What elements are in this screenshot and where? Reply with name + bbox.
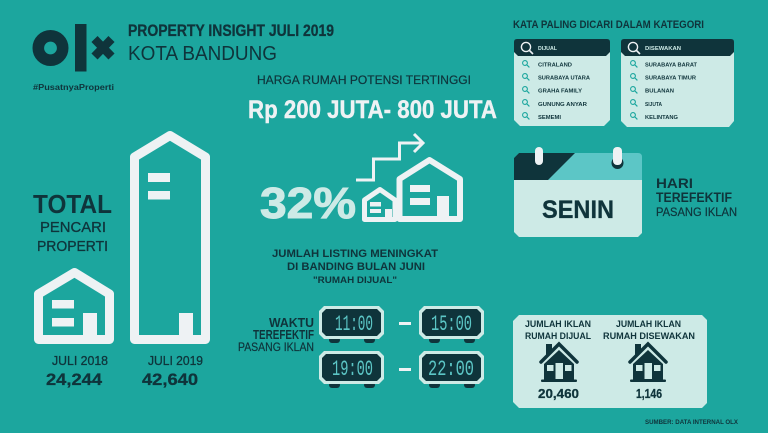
value: 20,460: 20,460	[538, 386, 579, 401]
panel: disewakan search list	[621, 39, 734, 127]
text: waktu terefektif: PASANG IKLAN	[238, 342, 314, 354]
clock: 19:00: 19:00	[332, 357, 373, 382]
price range: Rp 200 JUTA- 800 JUTA	[248, 96, 497, 124]
panel: dijual search list: DIJUAL	[538, 46, 557, 52]
panel: dijual search list: GUNUNG ANYAR	[538, 102, 588, 108]
icon: tall building 2019	[134, 136, 206, 340]
clock: 22:00: 22:00	[428, 357, 474, 382]
text: jumlah listing: JUMLAH LISTING MENINGKAT	[272, 248, 438, 260]
text: jumlah listing	[272, 248, 438, 285]
stat: juli 2018: 24,244	[46, 370, 103, 389]
stat: juli 2019	[142, 353, 203, 389]
text: jumlah iklan disewakan: JUMLAH IKLAN	[616, 319, 681, 329]
text: total pencari properti: PENCARI	[40, 219, 106, 236]
clock: 22:00	[419, 351, 484, 388]
stat: 32 percent: 32%	[260, 179, 356, 228]
text: jumlah iklan disewakan	[603, 319, 695, 341]
arrow: rising steps	[356, 134, 423, 180]
panel: dijual search list	[514, 39, 610, 126]
logo: OLX	[33, 24, 114, 92]
clock: 15:00	[419, 306, 484, 343]
calendar: senin: SENIN	[542, 196, 614, 224]
text: total pencari properti	[33, 189, 112, 255]
heading: harga rumah: HARGA RUMAH POTENSI TERTINGGI	[257, 73, 471, 87]
heading: kata paling dicari: KATA PALING DICARI DALAM KATEGORI	[513, 19, 704, 31]
panel: disewakan search list: DISEWAKAN	[645, 46, 681, 52]
stat: juli 2018: JULI 2018	[52, 353, 108, 368]
panel: dijual search list: CITRALAND	[538, 62, 572, 68]
stat: juli 2019: JULI 2019	[148, 353, 203, 368]
logo: OLX: #PusatnyaProperti	[33, 83, 114, 92]
text: jumlah iklan disewakan: RUMAH DISEWAKAN	[603, 331, 695, 341]
title	[128, 21, 334, 65]
icon: two houses	[364, 160, 460, 220]
icon: house disewakan	[630, 344, 666, 382]
text: waktu terefektif: TEREFEKTIF	[253, 328, 314, 342]
text: total pencari properti: PROPERTI	[37, 238, 108, 255]
text: hari terefektif: PASANG IKLAN	[656, 207, 737, 219]
text: jumlah iklan dijual: RUMAH DIJUAL	[525, 331, 591, 341]
clock: 11:00	[319, 306, 384, 343]
text: waktu terefektif: WAKTU	[269, 316, 314, 330]
title: PROPERTY INSIGHT JULI 2019	[128, 21, 334, 40]
dash	[399, 322, 411, 325]
stat: juli 2019: 42,640	[142, 370, 198, 389]
panel: disewakan search list: BULANAN	[645, 88, 674, 94]
source note: SUMBER: DATA INTERNAL OLX	[645, 419, 739, 426]
clock: 11:00: 11:00	[335, 312, 373, 337]
dash	[399, 368, 411, 371]
text: jumlah listing: DI BANDING BULAN JUNI	[287, 261, 425, 273]
text: hari terefektif: HARI	[656, 175, 693, 191]
text: hari terefektif: TEREFEKTIF	[656, 189, 732, 205]
stat: juli 2018	[46, 353, 108, 389]
panel: dijual search list: GRAHA FAMILY	[538, 88, 582, 94]
panel: jumlah iklan	[513, 315, 707, 408]
panel: disewakan search list: SURABAYA BARAT	[645, 62, 697, 68]
panel: dijual search list: SEMEMI	[538, 115, 561, 121]
panel: dijual search list: SURABAYA UTARA	[538, 76, 591, 82]
clock: 19:00	[319, 351, 384, 388]
text: jumlah iklan dijual: JUMLAH IKLAN	[525, 319, 591, 329]
title: KOTA BANDUNG	[128, 43, 277, 65]
panel: disewakan search list: KELINTANG	[645, 115, 678, 121]
text: hari terefektif	[656, 175, 737, 219]
calendar: senin	[514, 147, 642, 237]
value: 1,146: 1,146	[636, 386, 662, 401]
clock: 15:00: 15:00	[431, 312, 472, 337]
text: jumlah iklan dijual	[525, 319, 591, 341]
panel: disewakan search list: SIJUTA	[645, 102, 663, 108]
text: jumlah listing: "RUMAH DIJUAL"	[313, 275, 397, 285]
text: total pencari properti: TOTAL	[33, 189, 112, 219]
text: waktu terefektif	[238, 316, 314, 354]
icon: house dijual	[541, 344, 577, 382]
panel: disewakan search list: SURABAYA TIMUR	[645, 76, 697, 82]
icon: small house 2018	[38, 272, 110, 340]
